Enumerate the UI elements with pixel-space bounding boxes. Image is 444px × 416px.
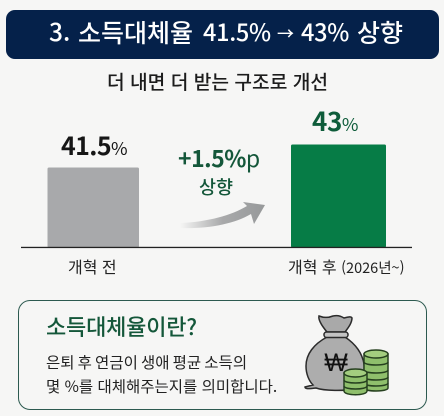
chart baseline: [21, 247, 412, 248]
bar: before: [48, 168, 139, 248]
icon: money bag and coins: [304, 314, 389, 396]
change label: +1.5%p: [178, 140, 260, 174]
panel: definition: [18, 300, 427, 410]
after label: 개혁 후 (2026년~): [288, 254, 405, 278]
panel text: 몇 %를 대체해주는지를 의미합니다.: [46, 375, 277, 397]
title banner: 상향: [357, 14, 403, 50]
after value: 43%: [312, 102, 358, 139]
title banner: 3.: [49, 14, 70, 49]
panel text: [46, 351, 277, 397]
title banner: 41.5%: [203, 14, 271, 48]
title banner: 소득대체율: [78, 14, 193, 50]
arrow: [180, 202, 265, 228]
subtitle: 더 내면 더 받는 구조로 개선: [107, 67, 328, 95]
won symbol: ₩: [324, 349, 348, 377]
title banner: [6, 10, 439, 59]
panel heading: 소득대체율이란?: [46, 310, 197, 342]
title banner: 43%: [301, 14, 349, 48]
before label: 개혁 전: [68, 254, 117, 278]
title banner: →: [277, 20, 294, 45]
change word: 상향: [199, 174, 233, 200]
bar: after: [291, 144, 386, 248]
panel text: 은퇴 후 연금이 생애 평균 소득의: [46, 351, 247, 373]
before value: 41.5%: [61, 127, 127, 163]
